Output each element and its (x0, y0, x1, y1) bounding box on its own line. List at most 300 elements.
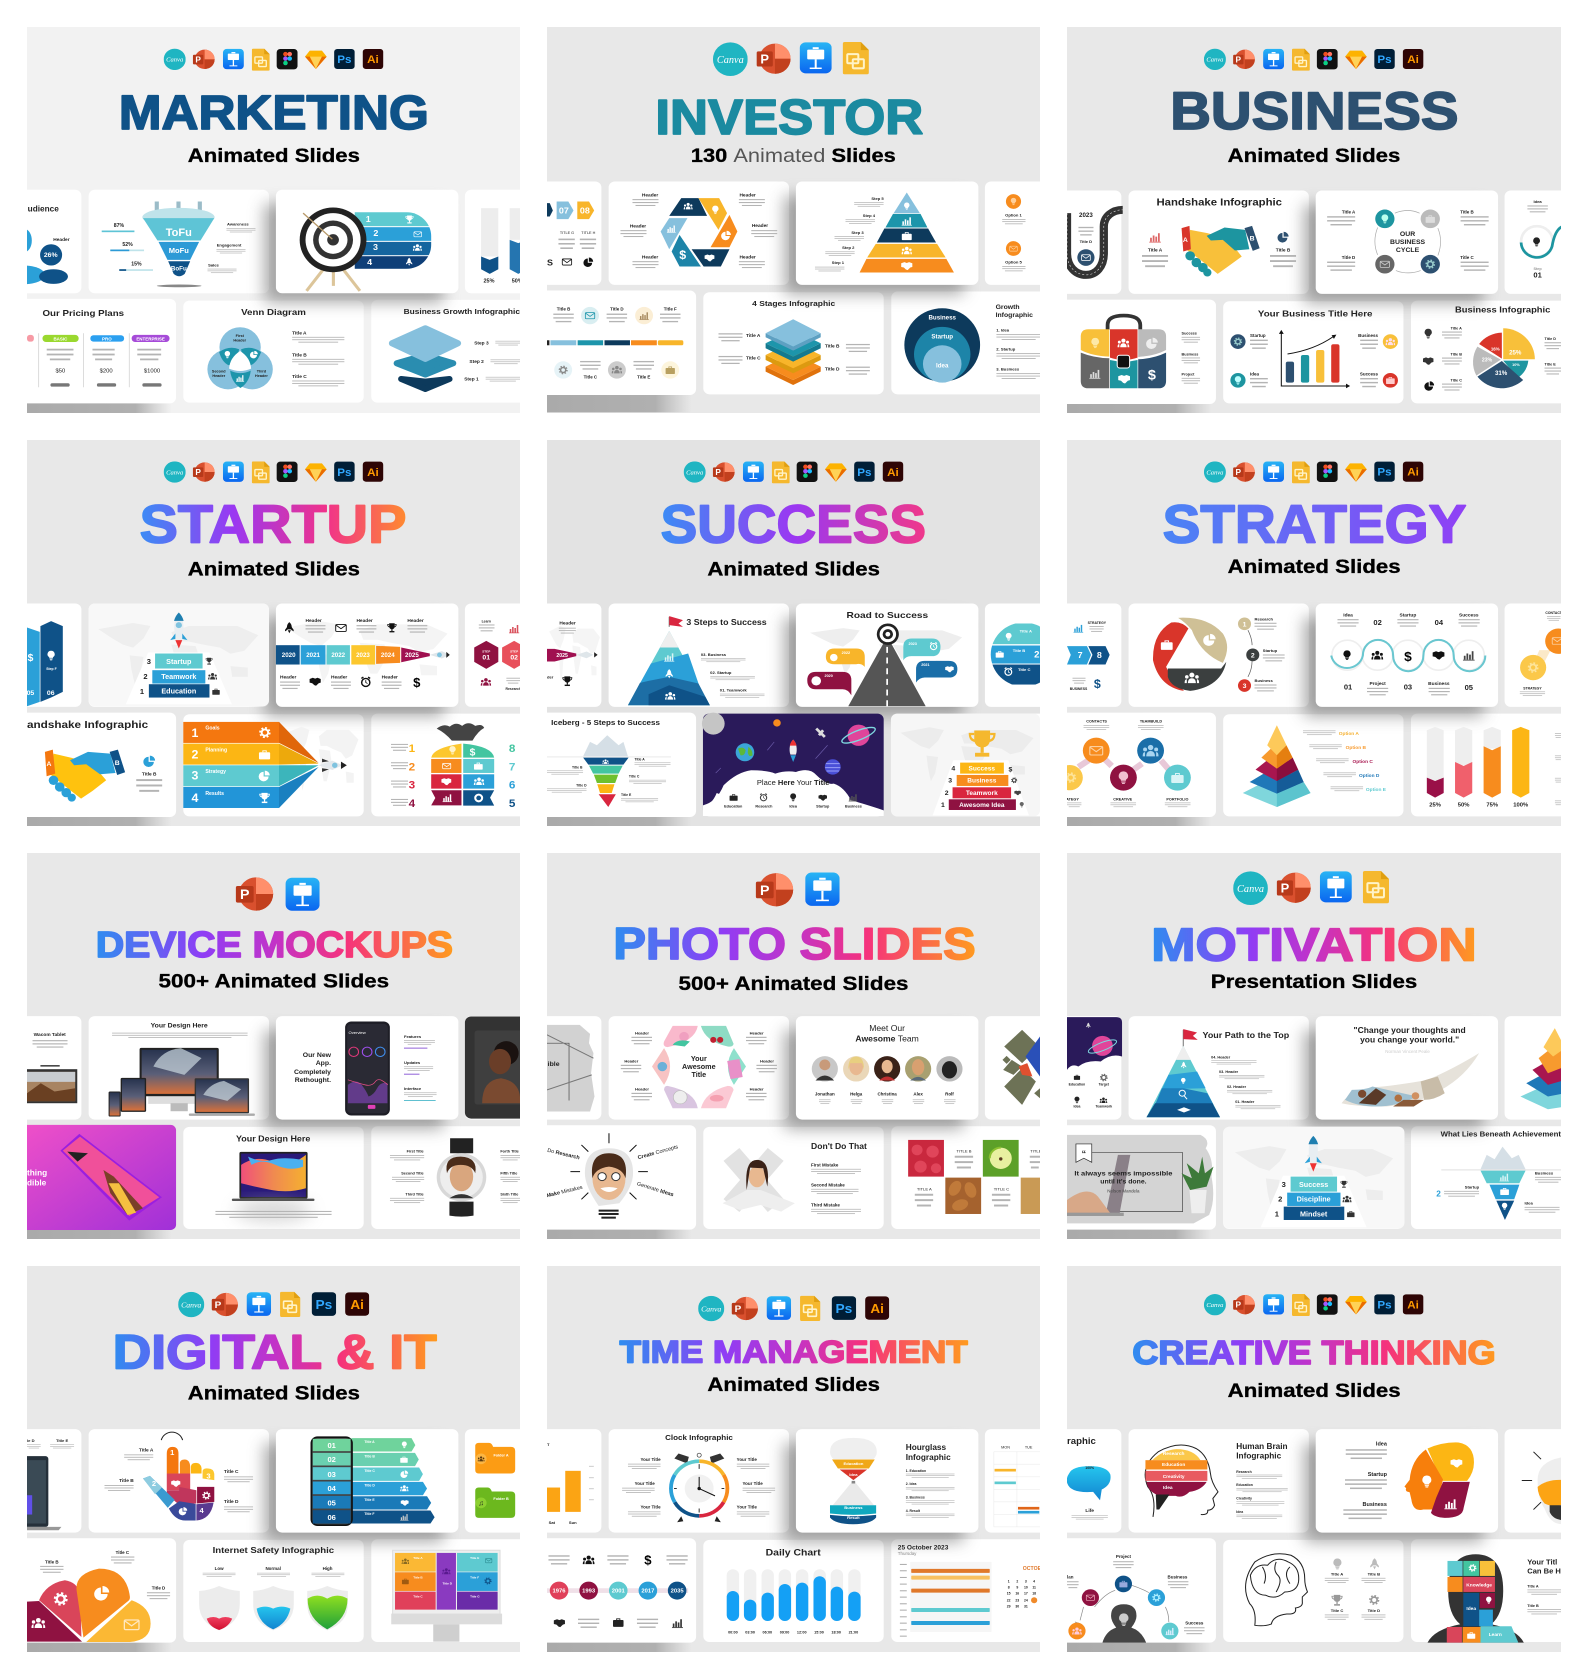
card: circular cycle: 1 (1243, 622, 1247, 628)
card: schedule: 3 (1025, 1579, 1027, 1583)
card: growth circles: Growth (996, 304, 1020, 311)
card: arrow steps: TITLE G (560, 231, 574, 235)
card: circle network right: CONTACTS (1545, 611, 1565, 615)
subtitle: Animated Slides (188, 145, 360, 167)
card: rocket funnel: 1 (192, 726, 199, 740)
card: magenta phone (21, 1125, 176, 1230)
card: trophy stairs: 4 (951, 766, 955, 773)
card: 3D percent bars: 25% (1429, 802, 1441, 808)
card: timeline: Title E (637, 375, 650, 380)
card: trophy stairs: Teamwork (966, 790, 998, 797)
card: clock: Your Title (737, 1457, 757, 1462)
app icons (1233, 871, 1389, 905)
card: hourglass: Idea (849, 1472, 858, 1477)
card: mountain (628, 616, 767, 705)
card: bar chart: Your Business Title Here (1258, 309, 1373, 319)
card: imac puzzle: Title D (443, 1581, 453, 1585)
card: daily chart: 06:00 (763, 1630, 772, 1634)
card: venn diagram: Header (255, 374, 268, 378)
subtitle: Animated Slides (1228, 145, 1400, 167)
card: rocket timeline: Header (356, 618, 373, 624)
card: year timeline: 2001 (612, 1589, 626, 1595)
card: quote photo: Nelson Mandela (1107, 1189, 1140, 1194)
card: hexagon cycle: $ (679, 248, 686, 262)
card: hexagon cycle: Header (630, 224, 646, 229)
card: hexagon steps (474, 620, 526, 691)
card: audience: 26% (44, 252, 58, 259)
card: icon grid: Title A (1331, 1572, 1343, 1577)
card: schedule: 8 (1008, 1585, 1010, 1589)
panel: investor (547, 27, 1040, 413)
card: path to the top: 02. Header (1227, 1085, 1247, 1089)
card: pie chart: 23% (1482, 358, 1493, 364)
card: space rocket: Education (724, 804, 743, 808)
card: rocket timeline: Header (280, 675, 297, 681)
card: quote photo: It always seems impossible (1074, 1170, 1173, 1177)
card: mountain: 3 Steps to Success (686, 618, 767, 627)
card: funnel: Engagement (217, 243, 242, 248)
card: funnel: Awareness (227, 222, 249, 226)
card: pie chart: 25% (1509, 349, 1522, 356)
card: wave steps: Business (1428, 681, 1450, 687)
card: schedule: 24 (1024, 1598, 1028, 1602)
card: money bag: 5 (509, 798, 516, 810)
card: imac puzzle: Title E (470, 1556, 479, 1560)
card: money bag: 1 (409, 743, 416, 755)
card: folders: Folder A (493, 1454, 509, 1457)
card: rocket funnel: 3 (192, 769, 199, 783)
card: 3D pyramid: Option A (1339, 731, 1359, 737)
card: food grid: TITLE A (917, 1186, 932, 1191)
card: year timeline (547, 1552, 688, 1628)
card: meet our team: Jonathan (815, 1092, 835, 1097)
card: business cycle: Title D (1342, 255, 1355, 260)
card: pricing plans: $200 (100, 368, 113, 374)
card: pie chart: 31% (1495, 370, 1508, 377)
card: phone arrows: Title E (364, 1498, 375, 1502)
card: rocket stairs: 2 (143, 672, 148, 681)
title: STRATEGY (1163, 495, 1466, 555)
card: hexagon steps: Research (506, 687, 521, 691)
card: road to success: Road to Success (847, 610, 928, 620)
card: head network: Business (1168, 1575, 1188, 1580)
card: funnel: 52% (122, 242, 133, 248)
card: growth circles: Startup (931, 333, 953, 340)
card: schedule: 11 (1032, 1585, 1036, 1589)
card: road (1067, 210, 1123, 275)
card: hexagon steps: 02 (510, 655, 518, 661)
card: hourglass: Business (844, 1505, 863, 1510)
card: iceberg: 2 (1436, 1190, 1441, 1199)
card: money bag: $ (470, 747, 476, 758)
card: phone app: App. (316, 1060, 331, 1067)
card: human brain: Human Brain (1236, 1442, 1288, 1451)
card: path to the top: 04. Header (1211, 1056, 1231, 1059)
card: phone arrows: 04 (327, 1484, 337, 1493)
card: pie chart: Title C (1450, 379, 1462, 383)
card: schedule: 4 (1033, 1579, 1035, 1583)
slide cards (17, 190, 534, 421)
card: bar chart: Startup (1250, 333, 1266, 338)
card: laptop (21, 1438, 74, 1530)
card: 3D percent bars: 50% (1458, 802, 1469, 808)
card: food grid: TITLE B (956, 1149, 972, 1154)
card: circle rows: Title C (1018, 667, 1031, 672)
panel: success (547, 440, 1040, 826)
card: quote photo (1067, 1135, 1214, 1223)
card: handshake: B (115, 760, 120, 767)
slide cards (537, 181, 1054, 412)
card: circle network (1057, 720, 1191, 807)
card: arrow steps: 07 (559, 206, 569, 215)
card: puzzle hand: 2 (152, 1479, 156, 1488)
card: wave steps: Project (1369, 681, 1386, 687)
card: circle network right: STRATEGY (1523, 687, 1542, 691)
card: petal photos: Header (635, 1031, 649, 1035)
card: hexagon cycle: Header (752, 223, 768, 229)
title: MOTIVATION (1151, 919, 1477, 970)
title: MARKETING (119, 87, 429, 140)
card: arrow steps: 08 (580, 206, 590, 215)
card: puzzle silhouette: Your Titl (1527, 1558, 1557, 1567)
card: schedule: 17 (1024, 1592, 1028, 1596)
card: human brain: Creativity (1163, 1474, 1185, 1480)
card: phone app: Rethought. (295, 1077, 331, 1084)
card: step ring: 01 (1533, 271, 1542, 280)
card: orange bars (547, 1442, 594, 1525)
card: briefcase: Success (1182, 332, 1197, 336)
card: food grid (908, 1140, 1042, 1214)
app icons (178, 1292, 369, 1317)
card: daily chart: 03:00 (745, 1630, 755, 1634)
card: bar chart: Success (1360, 371, 1379, 376)
card: clock: Clock Infographic (665, 1433, 733, 1442)
card: quote (1342, 1026, 1479, 1107)
card: schedule: OCTOE (1023, 1566, 1042, 1572)
card: hexagon cycle: Header (739, 193, 756, 198)
card: pyramid: Step 2 (842, 245, 855, 250)
card: puzzle head: Startup (1368, 1472, 1388, 1478)
card: business cycle: OUR (1400, 231, 1415, 238)
card: iceberg: Title E (621, 793, 632, 797)
card: handshake: A (47, 761, 52, 768)
card: photo portrait (465, 1016, 530, 1119)
card: pyramid (815, 192, 954, 273)
card: petal photos: Title (691, 1071, 706, 1079)
card: pricing plans: PRO (102, 336, 112, 341)
card: circle network: PORTFOLIO (1166, 797, 1189, 801)
card: circular cycle (1153, 617, 1285, 692)
card: pie chart: Title A (1451, 326, 1462, 330)
card: phone arrows: 05 (327, 1499, 336, 1508)
card: dont do that: Don't Do That (811, 1142, 867, 1151)
card: wave steps: $ (1404, 649, 1412, 664)
card: petal fan: Title B (45, 1559, 59, 1564)
subtitle: Animated Slides (188, 559, 360, 580)
card: pie chart: Title E (1544, 362, 1556, 366)
card: audience: Header (53, 237, 70, 243)
card: circle rows: Title A (1020, 629, 1032, 633)
card: puzzle silhouette: Knowledge (1466, 1583, 1492, 1589)
card: trophy stairs (891, 714, 1040, 816)
card: target (300, 207, 432, 291)
card: circle network: CREATIVE (1113, 797, 1133, 801)
card: chevrons: $ (1094, 677, 1101, 691)
card: puzzle head: Idea (1376, 1442, 1388, 1447)
card: schedule: 16 (1015, 1592, 1019, 1596)
card: watch (390, 1138, 520, 1217)
card: space icons: Target (1099, 1083, 1110, 1087)
card: audience (4, 205, 70, 284)
card: business cycle: Title A (1342, 210, 1356, 214)
card: phone app (294, 1021, 437, 1116)
card: space icons: Education (1069, 1083, 1085, 1087)
card: imac puzzle: Title B (413, 1575, 423, 1579)
card: quote: you change your world." (1360, 1036, 1459, 1044)
card: petal photos: Header (760, 1059, 774, 1063)
card: human brain: Research (1236, 1470, 1252, 1474)
card: step ring: Step (1534, 267, 1542, 271)
card: rocket stairs: Discipline (1297, 1196, 1331, 1204)
card: hourglass: Infographic (906, 1453, 951, 1462)
card: circular cycle: Research (1254, 617, 1274, 621)
card: step pillars (27, 621, 63, 706)
card: venn diagram: Title A (292, 330, 307, 336)
card: speech brain: 100% (1085, 1466, 1094, 1470)
app icons (1204, 1294, 1423, 1316)
card: diamond photo (1002, 1030, 1040, 1105)
card: bar chart (1230, 309, 1398, 388)
card: rocket timeline: Header (331, 675, 347, 681)
card: imac puzzle (391, 1550, 502, 1642)
card: magenta phone: thing (27, 1168, 47, 1177)
card: money bag: 6 (509, 780, 515, 792)
card: schedule: 2 (1016, 1579, 1018, 1583)
card: human brain: Idea (1236, 1510, 1243, 1514)
card: trophy stairs: Awesome Idea (959, 802, 1005, 809)
card: circular cycle: 2 (1251, 653, 1255, 659)
card: briefcase: Project (1182, 373, 1195, 377)
card: trophy stairs: Business (967, 778, 997, 785)
card: calendar: TUE (1025, 1446, 1033, 1449)
card: wave steps: 02 (1373, 618, 1382, 627)
card: business cycle: CYCLE (1396, 247, 1420, 254)
card: daily chart: Daily Chart (766, 1548, 822, 1559)
slide cards (17, 1429, 534, 1660)
card: funnel: 87% (114, 223, 125, 229)
card: internet safety (199, 1545, 348, 1630)
card: funnel: 15% (131, 262, 142, 268)
card: 3D bars: 50% (512, 279, 523, 285)
card: iceberg: What Lies Beneath Achievement (1441, 1130, 1562, 1139)
card: head network: Project (1116, 1554, 1132, 1559)
card: pricing plans: ENTERPRISE (136, 336, 165, 341)
card: petal photos: Header (750, 1031, 764, 1035)
card: puzzle head: Business (1363, 1502, 1387, 1508)
card: puzzle hand: 4 (199, 1506, 205, 1515)
card: pie chart: 10% (1512, 363, 1520, 367)
card: schedule: 23 (1015, 1598, 1019, 1602)
panel: device mockups (27, 853, 520, 1239)
card: circular cycle: Startup (1263, 648, 1278, 653)
app icons (756, 873, 840, 906)
card: 3D pyramid (1243, 725, 1386, 807)
card: internet safety: Low (215, 1566, 224, 1571)
card: hourglass: 1. Education (906, 1469, 926, 1473)
card: idea bulb (546, 1133, 679, 1219)
card: stacked pyramid (1520, 1028, 1565, 1109)
card: watch: Second Title (401, 1171, 424, 1175)
card: puzzle hand: Title B (119, 1478, 134, 1484)
card: 3D pyramid: Option C (1353, 759, 1373, 765)
card: rocket stairs: 3 (1282, 1180, 1286, 1189)
card: orange bars: Sun (569, 1520, 577, 1525)
card: puzzle hand (104, 1432, 253, 1521)
slide cards (537, 603, 1054, 834)
card: phone app: Interface (404, 1086, 422, 1091)
card: funnel: ToFu (166, 227, 192, 239)
card: arrow steps (547, 201, 596, 268)
card: 3D pyramid: Option B (1346, 745, 1367, 751)
card: human brain: Research (1163, 1451, 1185, 1457)
card: circle network right (1520, 611, 1571, 696)
card: money bag: 4 (409, 798, 416, 810)
card: idea bulb: Make Mistakes (546, 1185, 584, 1199)
card: 4 stages: Title A (746, 333, 761, 339)
card: business growth: Business Growth Infographic (404, 307, 521, 316)
subtitle: Animated Slides (1228, 1380, 1401, 1402)
card: puzzle silhouette: Idea (1466, 1606, 1476, 1612)
card: head network: lan (1067, 1575, 1074, 1580)
card: clock (622, 1433, 775, 1522)
card: calendar (994, 1446, 1040, 1527)
subtitle: Animated Slides (188, 1383, 360, 1404)
card: 3D pyramid: Option E (1366, 787, 1386, 793)
subtitle: Animated Slides (1228, 556, 1401, 578)
card: target: 1 (366, 214, 371, 224)
card: wave steps: Startup (1399, 613, 1416, 618)
card: watch: Fifth Title (500, 1171, 517, 1175)
card: meet our team: Christina (877, 1092, 897, 1097)
card: meet our team: Alex (913, 1092, 923, 1097)
card: rocket timeline: 2020 (282, 652, 296, 659)
card: chevrons: 7 (1078, 650, 1083, 660)
card: venn diagram: Title B (292, 352, 307, 358)
card: rocket funnel: Strategy (205, 769, 226, 775)
card: speech brain: Life (1085, 1508, 1094, 1514)
card: trophy stairs: 1 (941, 802, 945, 809)
card: chevrons: STRATEGY (1088, 621, 1107, 625)
card: watch: Sixth Title (500, 1192, 518, 1196)
title: STARTUP (140, 496, 406, 555)
card: schedule: 18 (1032, 1592, 1036, 1596)
card: pie chart: Title D (1544, 337, 1556, 341)
card: 4 stages: Title C (746, 356, 761, 362)
card: business growth: Step 2 (469, 359, 484, 365)
card: 3D percent bars: 75% (1486, 802, 1498, 808)
card: daily chart: 15:00 (814, 1630, 824, 1634)
card: pyramid: Step 3 (851, 230, 864, 235)
card: timeline (547, 307, 683, 380)
card: arrow steps: S (547, 258, 553, 268)
title: INVESTOR (655, 90, 923, 145)
card: pyramid: Step 4 (863, 213, 876, 218)
card: hexagon cycle (620, 193, 777, 268)
card: path to the top: Your Path to the Top (1203, 1031, 1289, 1040)
panel: business (1067, 27, 1561, 413)
panel: motivation (1067, 853, 1562, 1239)
card: pie chart: Business Infographic (1455, 305, 1550, 315)
card: handshake (1142, 198, 1296, 277)
card: meet our team: Rolf (945, 1092, 954, 1097)
card: handshake: Handshake Infographic (1156, 198, 1282, 208)
card: iceberg: Title A (634, 757, 645, 761)
card: hexagon steps: 01 (482, 655, 490, 661)
card: hexagon steps: STEP (482, 650, 490, 654)
card: schedule: 15 (1007, 1592, 1011, 1596)
card: step ring (1521, 199, 1562, 280)
card: road to success: 2023 (908, 642, 917, 646)
card: business growth: Step 1 (464, 376, 479, 382)
card: phone arrows: Title C (364, 1469, 375, 1473)
app icons (236, 877, 320, 911)
card: options: Option 5 (1005, 260, 1023, 265)
card: human brain: Infographic (1236, 1452, 1282, 1460)
card: rocket timeline: $ (413, 675, 420, 690)
card: year timeline: 1993 (582, 1589, 595, 1595)
slide cards (17, 603, 534, 834)
card: human brain: Creativity (1236, 1497, 1252, 1501)
card: wave steps: Idea (1343, 613, 1353, 618)
card: puzzle hand: Title D (224, 1499, 239, 1505)
card: growth circles: Infographic (996, 312, 1033, 319)
card: folders (475, 1443, 515, 1518)
card: trophy stairs: Success (969, 766, 996, 773)
card: human brain: Education (1236, 1483, 1253, 1487)
card: venn diagram (207, 307, 344, 389)
card: quote photo: “ (1082, 1149, 1086, 1159)
card: venn diagram: Header (233, 338, 247, 342)
app icons (1204, 49, 1423, 71)
card: laptop: le D (27, 1438, 35, 1443)
card: 3D bars: 25% (484, 279, 495, 285)
card: hourglass: 2. Idea (906, 1482, 917, 1486)
card: business growth: Step 3 (474, 340, 489, 346)
card: human brain: Education (1162, 1462, 1185, 1468)
card: space rocket: Startup (816, 804, 830, 808)
card: imac puzzle: Title G (470, 1595, 480, 1599)
card: idea bulb: Do Research (547, 1148, 580, 1161)
card: watch: Third Title (405, 1192, 424, 1196)
card: puzzle silhouette: Title A (1527, 1584, 1539, 1588)
card: space rocket (702, 713, 884, 816)
title: DEVICE MOCKUPS (96, 925, 453, 965)
card: meet our team: Meet Our (869, 1023, 905, 1033)
card: handshake: andshake Infographic (27, 720, 149, 731)
card: quote: Norman Vincent Peale (1385, 1049, 1430, 1054)
card: rocket timeline: der (547, 675, 554, 680)
card: rocket timeline (547, 621, 600, 686)
card: orange bars: Sat (549, 1520, 556, 1525)
subtitle: Presentation Slides (1211, 971, 1417, 993)
card: pyramid: Step 1 (832, 260, 845, 265)
card: growth circles: Idea (936, 363, 949, 370)
card: brushed photo: ible (548, 1061, 560, 1068)
subtitle: 500+ Animated Slides (159, 971, 389, 992)
card: rocket timeline: 2025 (556, 653, 568, 659)
card: wave steps: 01 (1344, 683, 1352, 692)
subtitle: Animated Slides (707, 559, 880, 580)
